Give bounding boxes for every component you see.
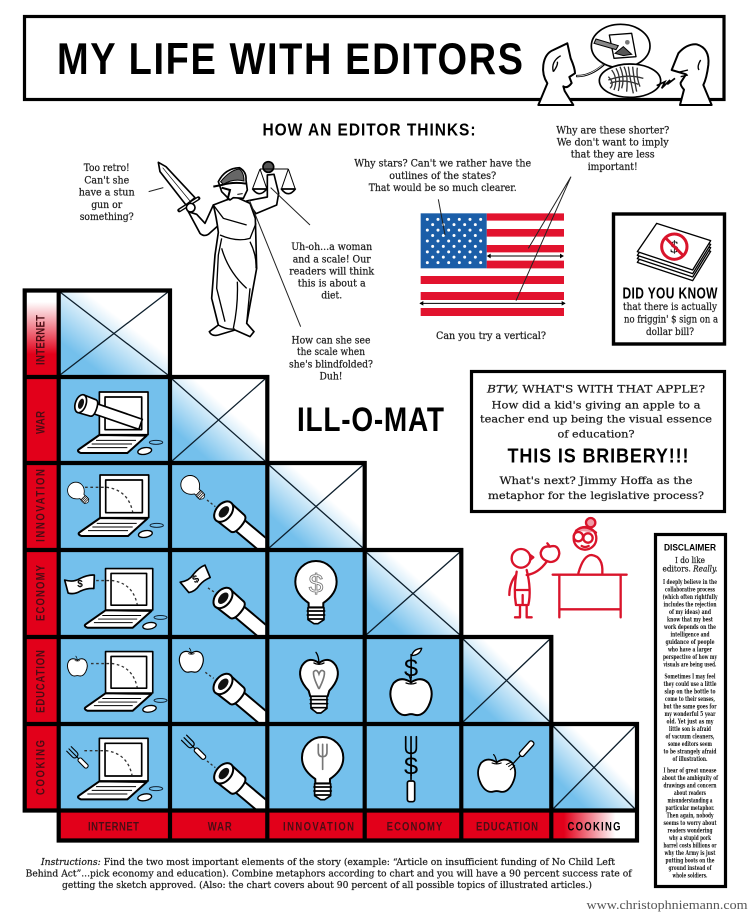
panel: what's with that apple: teacher end up being the visual essence bbox=[480, 414, 712, 426]
illustration: lady justice bbox=[149, 162, 310, 337]
cell: innovation x internet, bulb through laptop bbox=[60, 464, 169, 549]
column labels: COOKING bbox=[568, 821, 620, 834]
note: why are these shorter bbox=[556, 124, 670, 173]
disclaimer paragraph one: work depends on the bbox=[663, 624, 716, 631]
note: blindfolded: she's blindfolded? bbox=[289, 359, 373, 371]
disclaimer paragraph three: Then again, nobody bbox=[666, 813, 714, 820]
disclaimer paragraph two bbox=[664, 673, 717, 763]
cell: education x innovation, apple bulb bbox=[269, 639, 363, 723]
instructions: Behind Act”...pick economy and education). Combine metaphors according to chart and you will have a 90 percent success rate of bbox=[26, 868, 633, 880]
disclaimer paragraph one: I deeply believe in the bbox=[663, 579, 717, 586]
did you know text: no friggin' $ sign on a bbox=[624, 314, 718, 326]
column labels: EDUCATION bbox=[476, 821, 538, 834]
disclaimer paragraph two: to be strangely afraid bbox=[664, 748, 717, 755]
cell: economy x internet, money through laptop bbox=[60, 551, 169, 636]
column labels: WAR bbox=[208, 821, 232, 834]
disclaimer paragraph two: my wonderful 5 year bbox=[664, 711, 716, 718]
disclaimer intro bbox=[662, 556, 718, 575]
column labels bbox=[60, 812, 637, 839]
disclaimer paragraph three: misunderstanding a bbox=[668, 798, 713, 805]
cell: war x internet, cannon through laptop bbox=[60, 378, 169, 463]
disclaimer paragraph one: includes the rejection bbox=[664, 602, 717, 608]
note: why stars: Why stars? Can't we rather have the bbox=[354, 158, 531, 170]
panel: what's with that apple: BTW, WHAT'S WITH THAT APPLE? bbox=[486, 384, 705, 396]
cell: cooking x innovation, fork bulb bbox=[269, 726, 363, 810]
disclaimer paragraph two: slap on the bottle to bbox=[664, 688, 716, 695]
note: a woman and a scale: readers will think bbox=[289, 265, 375, 277]
disclaimer paragraph two: some editors seem bbox=[668, 741, 712, 748]
column labels: INTERNET bbox=[88, 821, 139, 834]
column labels: ECONOMY bbox=[387, 821, 442, 834]
panel: what's with that apple: THIS IS BRIBERY!!! bbox=[508, 445, 688, 468]
cell: innovation x war, cannon firing bulb bbox=[172, 465, 266, 548]
note: blindfolded: the scale when bbox=[297, 346, 365, 358]
disclaimer paragraph three: why the Army is just bbox=[664, 850, 716, 857]
note: why stars bbox=[354, 158, 531, 194]
row labels: EDUCATION bbox=[35, 650, 48, 713]
disclaimer paragraph two: of illustration. bbox=[672, 756, 708, 763]
cell: economy x war, cannon firing money: $ bbox=[190, 573, 202, 586]
note: why are these shorter: that they are less bbox=[571, 149, 655, 161]
row labels: WAR bbox=[35, 411, 48, 434]
note: why are these shorter: important! bbox=[588, 161, 638, 173]
heading: ill-o-mat: ILL-O-MAT bbox=[297, 400, 444, 439]
disclaimer paragraph three: ground instead of bbox=[668, 865, 712, 872]
cell: education x war, cannon firing apple bbox=[172, 639, 266, 722]
note: blindfolded: How can she see bbox=[292, 334, 370, 346]
cell: education x economy, dollar sprouting from apple bbox=[367, 639, 461, 723]
note: why are these shorter: Why are these shorter? bbox=[556, 124, 670, 136]
cell: cooking x internet, fork through laptop bbox=[60, 725, 169, 810]
disclaimer paragraph two: but the same goes for bbox=[664, 703, 717, 710]
note: too retro bbox=[79, 162, 135, 223]
column labels: INNOVATION bbox=[283, 821, 354, 834]
disclaimer intro: editors. Really. bbox=[662, 565, 718, 575]
note: a woman and a scale: and a scale! Our bbox=[293, 253, 372, 265]
title: MY LIFE WITH EDITORS bbox=[57, 34, 523, 84]
note: blindfolded: Duh! bbox=[320, 370, 342, 382]
row labels: COOKING bbox=[35, 740, 48, 795]
disclaimer paragraph two: old. Yet just as my bbox=[666, 718, 714, 725]
note: too retro: something? bbox=[80, 211, 134, 223]
disclaimer paragraph three: barrel costs billions or bbox=[664, 843, 717, 850]
panel: what's with that apple: of education? bbox=[558, 428, 635, 440]
note: a woman and a scale: this is about a bbox=[298, 278, 366, 290]
chart: ill-o-mat metaphor matrix bbox=[23, 288, 639, 856]
disclaimer intro: I do like bbox=[675, 556, 705, 566]
disclaimer paragraph three: readers wondering bbox=[668, 828, 713, 835]
disclaimer paragraph three: about the ambiguity of bbox=[662, 775, 718, 782]
note: a woman and a scale: diet. bbox=[321, 289, 342, 301]
heading: how an editor thinks: HOW AN EDITOR THINKS: bbox=[262, 121, 476, 140]
disclaimer paragraph one: of my ideas) and bbox=[669, 609, 712, 616]
cell: cooking x economy, fork with dollar: $ bbox=[404, 753, 418, 781]
panel: what's with that apple: What's next? Jimmy Hoffa as the bbox=[500, 475, 692, 487]
note: why stars: outlines of the states? bbox=[389, 170, 497, 182]
cell: education x internet, apple through laptop bbox=[60, 638, 169, 723]
note: a woman and a scale: Uh-oh...a woman bbox=[291, 241, 372, 253]
cell: economy x economy (crossed out) bbox=[366, 552, 460, 635]
instructions: getting the sketch approved. (Also: the chart covers about 90 percent of all possible topics of illustrated articles.) bbox=[62, 880, 592, 891]
cell: economy x innovation, dollar bulb: $ bbox=[309, 569, 324, 599]
note: too retro: Too retro! bbox=[84, 162, 130, 174]
note: why stars: That would be so much clearer. bbox=[369, 182, 517, 194]
title banner bbox=[24, 16, 724, 105]
grid lines bbox=[23, 288, 639, 842]
disclaimer paragraph two: come to their senses, bbox=[665, 696, 715, 703]
disclaimer paragraph three: drawings and concern bbox=[664, 783, 717, 790]
credit url: www.christophniemann.com bbox=[586, 897, 748, 912]
did you know text bbox=[622, 284, 718, 338]
panel: what's with that apple bbox=[472, 372, 724, 512]
disclaimer paragraph one: guidance of people bbox=[666, 639, 715, 646]
panel: did you know bbox=[614, 214, 724, 344]
illustration: kid giving apple to teacher bbox=[509, 518, 627, 617]
disclaimer paragraph one: intelligence and bbox=[670, 632, 710, 638]
illustration: american flag bbox=[419, 177, 571, 316]
disclaimer paragraph one: visuals are being used. bbox=[663, 662, 716, 668]
disclaimer paragraph one: who have a larger bbox=[667, 646, 713, 654]
disclaimer paragraph three: seems to worry about bbox=[664, 820, 717, 827]
disclaimer paragraph two: Sometimes I may feel bbox=[664, 673, 716, 680]
disclaimer paragraph two: they could use a little bbox=[664, 681, 717, 688]
icon: dollar bills with prohibition sign: $ bbox=[670, 238, 679, 257]
note: blindfolded bbox=[289, 334, 373, 382]
disclaimer paragraph three: particular metaphor. bbox=[666, 805, 714, 812]
did you know text: dollar bill? bbox=[646, 326, 694, 338]
note: too retro: Can't she bbox=[84, 174, 129, 186]
cell: education x economy, dollar sprouting from apple: $ bbox=[404, 654, 418, 682]
note: can you try a vertical: Can you try a vertical? bbox=[436, 330, 546, 342]
cell: cooking x education, fork in apple bbox=[463, 726, 551, 810]
row labels: INNOVATION bbox=[35, 469, 48, 542]
disclaimer heading: DISCLAIMER bbox=[664, 543, 716, 554]
panel: disclaimer bbox=[656, 534, 726, 886]
disclaimer paragraph three: putting boots on the bbox=[666, 858, 715, 865]
disclaimer paragraph three: about readers bbox=[674, 790, 706, 797]
note: too retro: gun or bbox=[91, 199, 123, 211]
cell: education x education (crossed out) bbox=[463, 639, 550, 722]
cell: economy x innovation, dollar bulb bbox=[269, 552, 363, 636]
disclaimer paragraph three bbox=[662, 768, 718, 880]
cell: economy x internet, money through laptop: $ bbox=[77, 579, 83, 590]
disclaimer paragraph three: whole soldiers. bbox=[672, 873, 708, 880]
note: why are these shorter: We don't want to imply bbox=[557, 137, 669, 149]
cell: economy x war, cannon firing money bbox=[172, 552, 266, 635]
disclaimer paragraph two: little son is afraid bbox=[669, 726, 712, 733]
cell: innovation x innovation (crossed out) bbox=[269, 465, 363, 548]
row labels: ECONOMY bbox=[35, 565, 48, 621]
did you know text: DID YOU KNOW bbox=[622, 284, 718, 302]
cell: internet x internet (crossed out) bbox=[60, 292, 168, 375]
disclaimer paragraph one: collaborative process bbox=[665, 586, 715, 594]
disclaimer paragraph one: know that my best bbox=[667, 616, 713, 624]
disclaimer paragraph one: perspective of how my bbox=[663, 654, 717, 661]
instructions: Instructions: Find the two most important elements of the story (example: “Article on insufficient funding of No Child Left bbox=[40, 857, 615, 868]
instructions bbox=[26, 857, 633, 891]
row labels bbox=[26, 292, 58, 809]
icon: illustrator and editor talking bbox=[538, 24, 712, 105]
row labels: INTERNET bbox=[35, 315, 48, 365]
note: too retro: have a stun bbox=[79, 187, 135, 199]
note: a woman and a scale bbox=[289, 241, 375, 301]
cell: cooking x economy, fork with dollar bbox=[367, 726, 461, 810]
cell: cooking x war, cannon firing fork bbox=[172, 726, 266, 808]
disclaimer paragraph one: (which often rightfully bbox=[662, 594, 718, 601]
cell: war x war (crossed out) bbox=[172, 379, 265, 461]
cell: cooking x cooking (crossed out) bbox=[553, 726, 635, 809]
disclaimer paragraph three: why a stupid pork bbox=[668, 835, 712, 842]
disclaimer paragraph three: I hear of great unease bbox=[664, 768, 717, 775]
panel: what's with that apple: How did a kid's giving an apple to a bbox=[492, 399, 700, 411]
did you know text: that there is actually bbox=[623, 301, 717, 313]
disclaimer paragraph two: of vacuum cleaners, bbox=[666, 733, 714, 740]
panel: what's with that apple: metaphor for the legislative process? bbox=[488, 490, 704, 502]
disclaimer paragraph one bbox=[662, 579, 718, 668]
